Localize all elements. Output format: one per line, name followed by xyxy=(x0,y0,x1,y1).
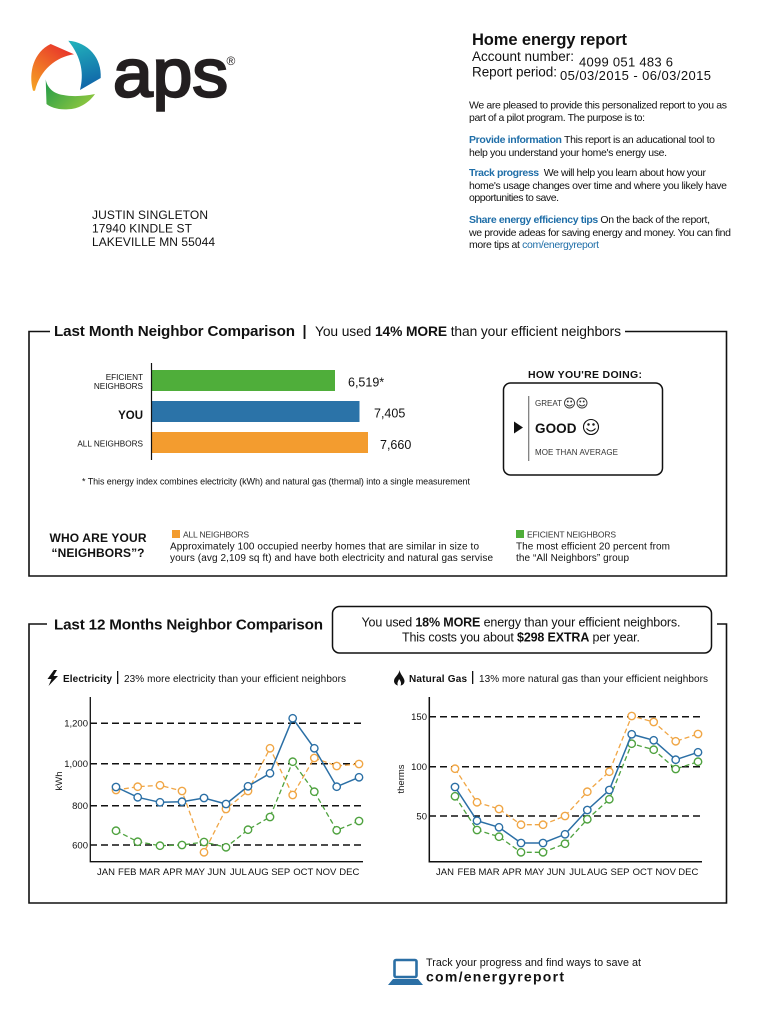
panel heading xyxy=(54,323,621,340)
intro text: part of a pilot program. The purpose is to: xyxy=(469,112,645,124)
panel heading: Last Month Neighbor Comparison xyxy=(54,323,295,340)
x axis labels xyxy=(436,867,698,878)
track progress: Track progress We will help you learn about how your xyxy=(469,167,706,179)
logo: aps xyxy=(31,36,236,112)
provide information: help you understand your home's energy use. xyxy=(469,147,667,159)
legend: efficient neighbors xyxy=(516,530,670,564)
x axis labels: NOV xyxy=(316,867,337,878)
x axis labels: APR xyxy=(163,867,183,878)
callout xyxy=(332,606,712,653)
x axis labels: APR xyxy=(502,867,522,878)
how you're doing: GREAT xyxy=(535,399,562,408)
x axis labels: AUG xyxy=(248,867,269,878)
report header: Home energy report xyxy=(472,31,628,49)
logo: aps: aps xyxy=(113,36,228,112)
legend: all neighbors: Approximately 100 occupied neerby homes that are similar in size to xyxy=(170,542,479,552)
x axis labels: DEC xyxy=(678,867,698,878)
bar chart: 7,660 xyxy=(380,438,411,452)
bar chart: EFICIENT xyxy=(106,373,143,382)
x axis labels xyxy=(97,867,359,878)
x axis labels: MAR xyxy=(139,867,160,878)
callout: You used 18% MORE energy than your efficient neighbors. xyxy=(362,616,680,630)
who are your neighbors: WHO ARE YOUR xyxy=(50,531,147,545)
provide information: Provide information This report is an aducational tool to xyxy=(469,134,715,146)
legend: all neighbors xyxy=(170,530,493,564)
electricity heading: 23% more electricity than your efficient neighbors xyxy=(124,674,346,685)
natural gas line chart xyxy=(396,697,702,878)
who are your neighbors xyxy=(50,531,147,560)
panel heading: You used 14% MORE than your efficient neighbors xyxy=(315,324,621,339)
series: efficient neighbors xyxy=(112,758,363,851)
electricity heading: Electricity xyxy=(63,674,112,685)
electricity heading xyxy=(48,670,346,686)
mailing address: JUSTIN SINGLETON xyxy=(92,208,208,222)
electricity line chart xyxy=(54,697,363,878)
legend: efficient neighbors: the “All Neighbors” group xyxy=(516,553,629,564)
mailing address: 17940 KINDLE ST xyxy=(92,222,193,236)
how you're doing: GOOD xyxy=(535,421,577,436)
footnote: * This energy index combines electricity (kWh) and natural gas (thermal) into a single measurement xyxy=(82,476,470,486)
series: you xyxy=(112,715,363,808)
y axis labels: kWh xyxy=(54,772,65,790)
legend: all neighbors: ALL NEIGHBORS xyxy=(183,530,249,540)
intro text: We are pleased to provide this personalized report to you as xyxy=(469,100,727,112)
y axis labels: 1,000 xyxy=(64,759,88,770)
x axis labels: DEC xyxy=(339,867,359,878)
y axis labels: 600 xyxy=(72,840,88,852)
panel: last 12 months neighbor comparison xyxy=(29,606,726,903)
icon: laptop xyxy=(388,960,423,985)
provide information xyxy=(469,134,715,159)
x axis labels: JUN xyxy=(207,867,226,878)
x axis labels: JAN xyxy=(97,867,115,878)
natural gas heading xyxy=(394,670,708,686)
share tips xyxy=(468,214,731,251)
x axis labels: OCT xyxy=(633,867,653,878)
footer call to action: Track your progress and find ways to save at xyxy=(426,957,641,969)
icon: smiley xyxy=(584,420,598,434)
icon: lightning bolt xyxy=(48,670,58,686)
footer call to action: com/energyreport xyxy=(426,968,564,984)
mailing address xyxy=(92,208,215,249)
bar chart: 6,519* xyxy=(348,376,384,390)
x axis labels: JUN xyxy=(547,867,565,878)
report header xyxy=(472,31,711,83)
legend: all neighbors: yours (avg 2,109 sq ft) and have both electricity and natural gas servise xyxy=(170,553,493,564)
legend: efficient neighbors: The most efficient 20 percent from xyxy=(516,542,670,552)
x axis labels: SEP xyxy=(610,867,630,878)
x axis labels: OCT xyxy=(293,867,314,878)
bar chart: ALL NEIGHBORS xyxy=(77,440,144,448)
icon: pointer arrow xyxy=(514,422,523,434)
x axis labels: JUL xyxy=(230,867,247,878)
how you're doing: HOW YOU'RE DOING: xyxy=(528,369,642,381)
track progress xyxy=(469,167,727,204)
track progress: home's usage changes over time and where you likely have xyxy=(469,180,727,192)
bar chart: 7,405 xyxy=(374,406,405,420)
y axis labels: 150 xyxy=(411,712,427,723)
y axis labels xyxy=(396,712,427,822)
series: you xyxy=(451,731,702,847)
y axis labels: 50 xyxy=(416,812,427,822)
footer call to action xyxy=(388,957,641,985)
legend: efficient neighbors: EFICIENT NEIGHBORS xyxy=(527,530,616,540)
how you're doing xyxy=(504,369,662,475)
panel: last month neighbor comparison xyxy=(29,323,726,576)
bar chart: YOU xyxy=(118,410,143,422)
panel heading: | xyxy=(302,324,307,340)
x axis labels: FEB xyxy=(118,867,137,878)
intro text xyxy=(468,100,731,251)
y axis labels: therms xyxy=(396,764,407,794)
share tips: Share energy efficiency tips On the back of the report, xyxy=(469,214,710,226)
y axis labels: 1,200 xyxy=(64,718,88,730)
report header: Report period: xyxy=(472,64,557,80)
bar chart xyxy=(77,363,411,460)
series: all neighbors xyxy=(451,712,702,828)
icon: two smileys xyxy=(564,398,587,408)
natural gas heading: Natural Gas xyxy=(409,674,467,685)
share tips: we provide adeas for saving energy and money. You can find xyxy=(468,227,731,239)
x axis labels: MAY xyxy=(524,867,545,878)
x axis labels: SEP xyxy=(271,867,290,878)
x axis labels: JUL xyxy=(569,867,586,878)
report header: 05/03/2015 - 06/03/2015 xyxy=(560,68,711,83)
track progress: opportunities to save. xyxy=(469,192,559,204)
how you're doing: MOE THAN AVERAGE xyxy=(535,448,618,457)
who are your neighbors: “NEIGHBORS”? xyxy=(52,546,144,560)
mailing address: LAKEVILLE MN 55044 xyxy=(92,235,215,249)
bar chart: NEIGHBORS xyxy=(94,382,144,391)
x axis labels: MAY xyxy=(185,867,206,878)
series: all neighbors xyxy=(112,745,363,856)
y axis labels: 100 xyxy=(411,762,427,773)
report header: 4099 051 483 6 xyxy=(579,54,673,70)
x axis labels: JAN xyxy=(436,867,454,878)
y axis labels xyxy=(54,718,88,852)
series: efficient neighbors xyxy=(451,740,702,856)
natural gas heading: 13% more natural gas than your efficient neighbors xyxy=(479,674,708,685)
report header: Account number: xyxy=(472,49,574,64)
x axis labels: AUG xyxy=(587,867,608,878)
share tips: more tips at com/energyreport xyxy=(469,239,599,251)
x axis labels: NOV xyxy=(655,867,677,878)
y axis labels: 800 xyxy=(72,801,88,812)
icon: flame xyxy=(394,670,404,686)
panel heading: Last 12 Months Neighbor Comparison xyxy=(54,616,323,634)
logo: aps: ® xyxy=(226,54,236,68)
x axis labels: MAR xyxy=(478,867,500,878)
callout: This costs you about $298 EXTRA per year. xyxy=(402,630,640,644)
x axis labels: FEB xyxy=(457,867,476,878)
